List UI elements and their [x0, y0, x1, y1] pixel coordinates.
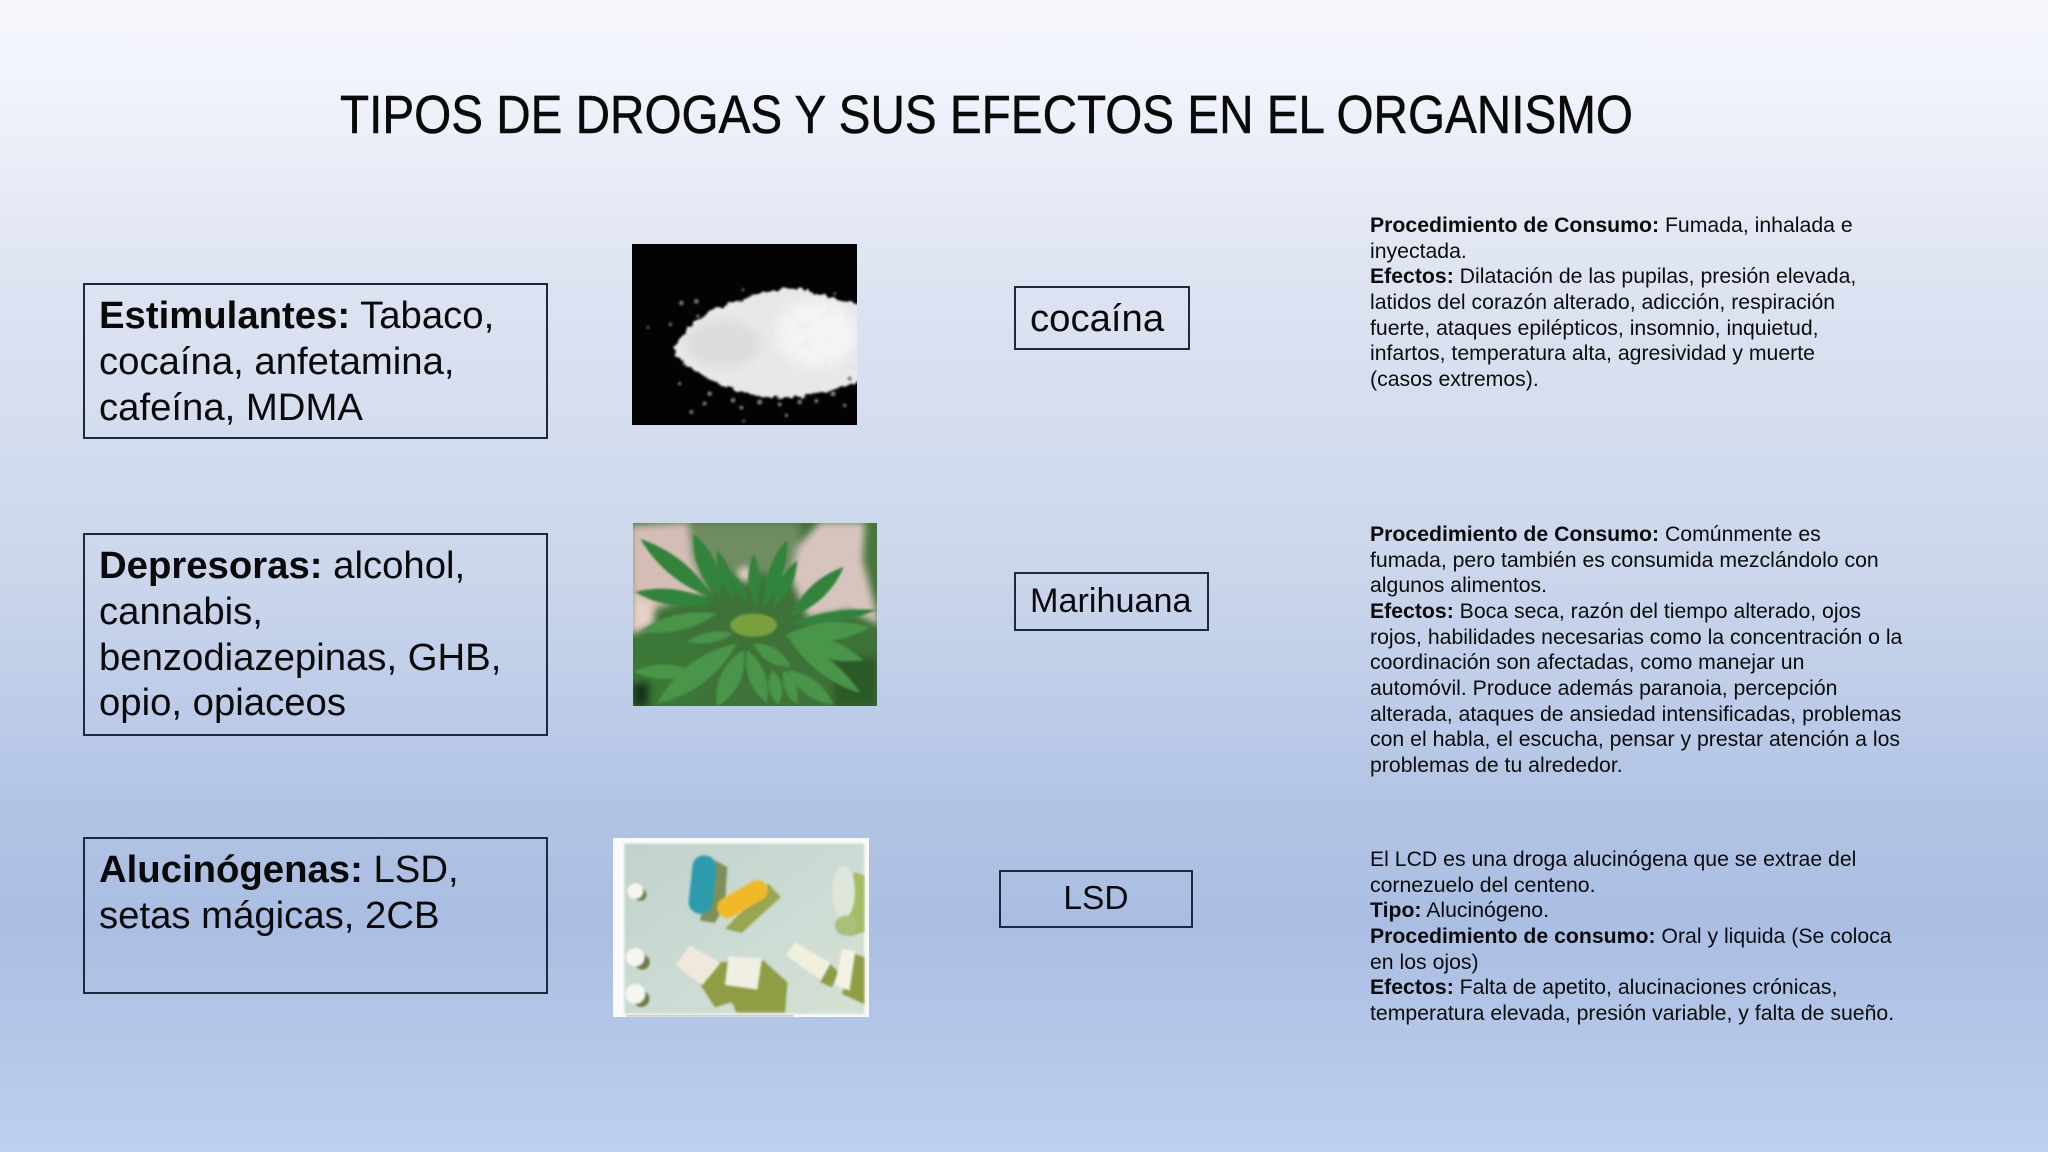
label: marihuana [1014, 572, 1209, 631]
description: marihuana: algunos alimentos. [1370, 573, 1547, 597]
description: marihuana: automóvil. Produce además paranoia, percepción [1370, 676, 1837, 700]
panel: estimulantes category: cafeína, MDMA [99, 386, 363, 429]
loose grains [647, 288, 852, 422]
image: cannabis leaf held by hands [633, 523, 877, 706]
description: cocaina: Procedimiento de Consumo: Fumada, inhalada e [1370, 213, 1853, 237]
panel: depresoras category: Depresoras: alcohol, [99, 544, 465, 587]
description: LSD: Procedimiento de consumo: Oral y liquida (Se coloca [1370, 924, 1892, 948]
shadows [633, 860, 864, 1012]
hands [630, 522, 880, 635]
description: cocaina: inyectada. [1370, 239, 1467, 263]
label: marihuana: Marihuana [1030, 582, 1192, 620]
panel: depresoras category: cannabis, [99, 590, 263, 633]
description: cocaina [1370, 213, 1856, 391]
description: marihuana: alterada, ataques de ansiedad intensificadas, problemas [1370, 702, 1901, 726]
description: cocaina: latidos del corazón alterado, adicción, respiración [1370, 290, 1835, 314]
description: cocaina: infartos, temperatura alta, agresividad y muerte [1370, 341, 1815, 365]
description: marihuana: Efectos: Boca seca, razón del tiempo alterado, ojos [1370, 599, 1861, 623]
panel: alucinogenas category [83, 837, 548, 994]
cannabis leaflets [634, 530, 878, 712]
description: LSD: Tipo: Alucinógeno. [1370, 898, 1549, 922]
description: marihuana: fumada, pero también es consumida mezclándolo con [1370, 548, 1879, 572]
label: LSD: LSD [1063, 880, 1129, 917]
label: cocaina: cocaína [1030, 297, 1164, 340]
description: LSD: en los ojos) [1370, 950, 1479, 974]
description: cocaina: fuerte, ataques epilépticos, insomnio, inquietud, [1370, 316, 1819, 340]
panel: estimulantes category: Estimulantes: Tabaco, [99, 294, 494, 337]
description: cocaina: (casos extremos). [1370, 367, 1539, 391]
description: marihuana: Procedimiento de Consumo: Comúnmente es [1370, 522, 1821, 546]
panel: estimulantes category: cocaína, anfetamina, [99, 340, 455, 383]
image: cocaine powder [632, 244, 857, 425]
label: cocaina [1014, 286, 1190, 350]
panel: alucinogenas category: setas mágicas, 2CB [99, 894, 440, 937]
panel: depresoras category [83, 533, 548, 736]
description: cocaina: Efectos: Dilatación de las pupilas, presión elevada, [1370, 264, 1856, 288]
description: marihuana [1370, 522, 1902, 777]
description: marihuana: con el habla, el escucha, pensar y prestar atención a los [1370, 727, 1900, 751]
panel: alucinogenas category: Alucinógenas: LSD, [99, 848, 459, 891]
foliage background [633, 523, 877, 707]
description: LSD: cornezuelo del centeno. [1370, 873, 1595, 897]
description: LSD: Efectos: Falta de apetito, alucinaciones crónicas, [1370, 975, 1837, 999]
description: LSD [1370, 847, 1894, 1025]
image: assorted pills [613, 838, 869, 1017]
description: marihuana: rojos, habilidades necesarias como la concentración o la [1370, 625, 1902, 649]
panel: depresoras category: opio, opiaceos [99, 681, 346, 724]
description: marihuana: problemas de tu alrededor. [1370, 753, 1623, 777]
description: marihuana: coordinación son afectadas, como manejar un [1370, 650, 1804, 674]
label: LSD [999, 870, 1193, 928]
caption smudge [626, 1015, 793, 1017]
description: LSD: El LCD es una droga alucinógena que se extrae del [1370, 847, 1856, 871]
description: LSD: temperatura elevada, presión variable, y falta de sueño. [1370, 1001, 1894, 1025]
panel: estimulantes category [83, 283, 548, 439]
powder mound [674, 288, 876, 398]
panel: depresoras category: benzodiazepinas, GHB, [99, 636, 501, 679]
capsules and tablets [625, 854, 858, 1004]
